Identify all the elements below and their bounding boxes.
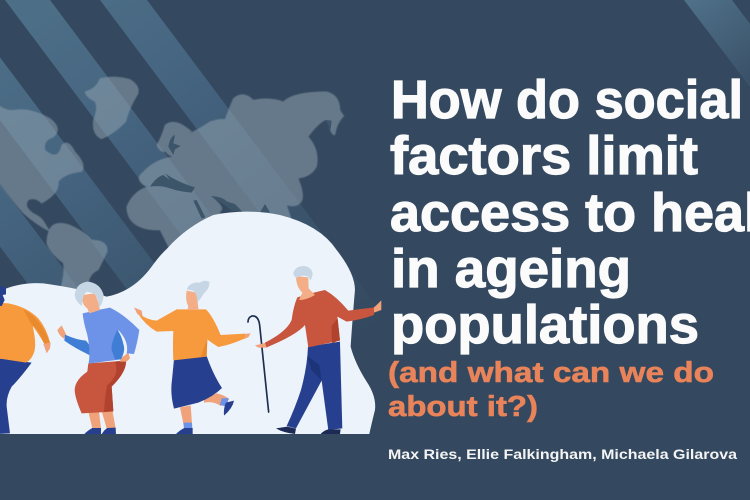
left man trousers <box>0 358 32 434</box>
woman in orange <box>134 281 251 434</box>
left man arm shade <box>23 309 50 344</box>
orange woman shoe <box>176 428 193 434</box>
blue woman skirt <box>75 361 126 413</box>
blue woman sweater shade <box>112 330 124 359</box>
red man trousers <box>287 342 342 430</box>
orange woman standing leg <box>180 405 192 423</box>
orange woman sweater <box>137 309 245 360</box>
subtitle line 1: (and what can we do <box>388 357 714 389</box>
red man hands <box>255 300 381 348</box>
blue woman skirt shade <box>104 361 126 412</box>
red man neck and face <box>296 276 315 300</box>
title line 2: factors limit <box>390 126 698 186</box>
blue woman neck and face <box>82 293 100 313</box>
authors: Max Ries, Ellie Falkingham, Michaela Gilarova <box>388 447 738 462</box>
woman in blue <box>57 282 139 434</box>
inland seas <box>150 120 332 219</box>
orange woman neck and face <box>186 291 199 310</box>
orange woman sweater shade <box>201 339 207 357</box>
left man hat and beard <box>0 285 6 306</box>
blue woman legs <box>88 410 116 428</box>
title line 1: How do social <box>391 70 743 130</box>
left man sweater <box>0 303 50 363</box>
africa <box>127 186 220 250</box>
blue woman left hand <box>57 325 66 339</box>
blue woman sweater <box>83 308 139 364</box>
subtitle line 2: about it?) <box>388 391 538 423</box>
orange woman skirt <box>171 356 222 409</box>
illustration: dancing elderly people <box>0 212 381 434</box>
orange woman raised leg <box>204 393 229 406</box>
blue woman shoes <box>84 428 116 434</box>
title line 5: populations <box>391 295 699 355</box>
world map <box>0 77 344 291</box>
red man sweater <box>265 290 374 347</box>
greenland <box>85 77 139 139</box>
red man sweater shade <box>332 318 340 343</box>
eurasia <box>139 92 344 220</box>
orange woman raised shoe <box>224 401 234 416</box>
red man shoes <box>276 427 341 434</box>
orange woman raised sock <box>220 398 229 407</box>
north america <box>0 105 83 232</box>
orange woman sock <box>183 423 192 428</box>
walking cane <box>248 316 269 412</box>
orange woman hair <box>187 281 209 303</box>
red man trouser shade <box>307 356 322 381</box>
blue woman forearm <box>64 335 91 355</box>
title line 4: in ageing <box>391 239 631 299</box>
left man hand <box>43 343 51 353</box>
man in red <box>255 266 381 434</box>
title <box>390 70 750 355</box>
blue woman hair <box>75 282 104 307</box>
white blob background <box>0 212 375 434</box>
south america <box>47 223 107 291</box>
blue woman right hand <box>120 353 130 362</box>
red man hair <box>293 266 313 281</box>
orange woman hands <box>134 307 251 339</box>
man on left <box>0 285 51 434</box>
ground band <box>0 434 750 500</box>
subtitle <box>388 357 714 423</box>
